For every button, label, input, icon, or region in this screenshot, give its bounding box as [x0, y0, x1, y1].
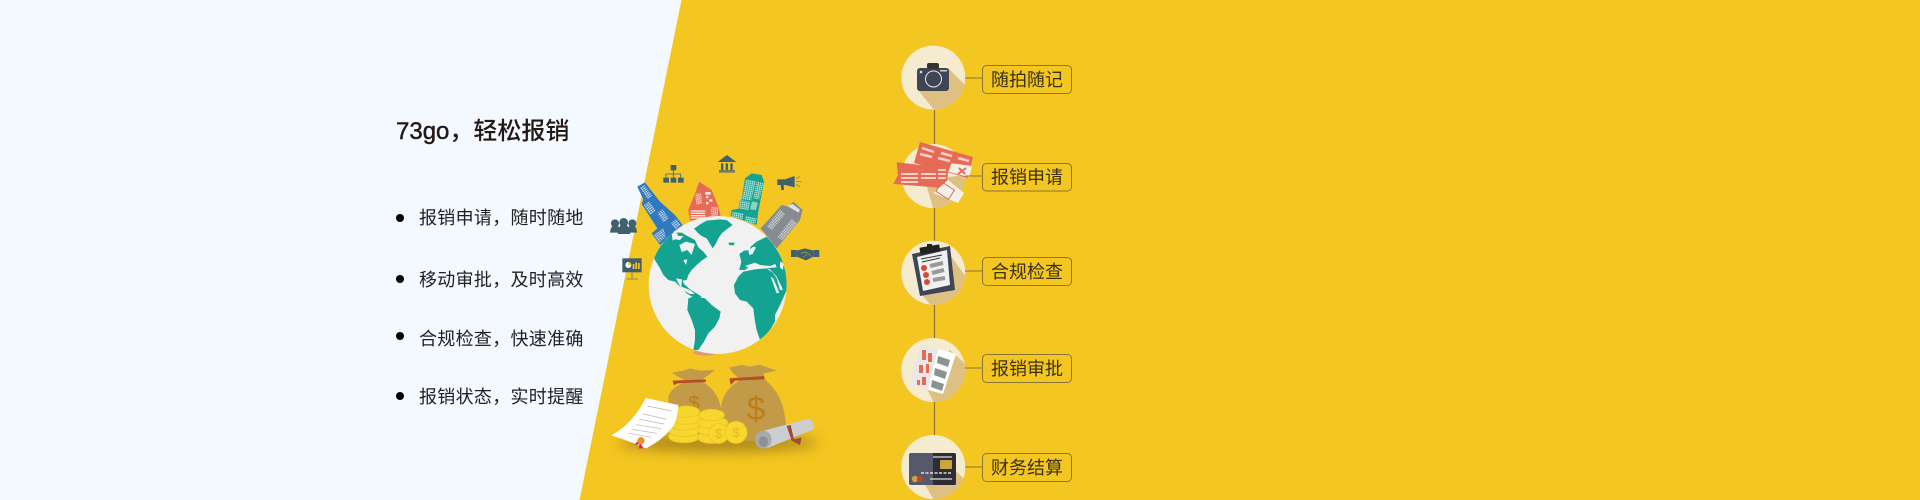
feature list: 移动审批，及时高效 [419, 270, 584, 290]
step 1: camera: 随拍随记 [991, 70, 1063, 90]
feature list: 报销状态，实时提醒 [419, 387, 584, 407]
building: green tower [731, 173, 764, 225]
building: blue tower [637, 182, 683, 245]
money bag right [721, 365, 786, 442]
step 5: bank card: 财务结算 [991, 458, 1063, 478]
money illustration: $ [732, 426, 740, 440]
icon: bank [718, 155, 736, 173]
ground shadow [618, 434, 818, 451]
building: red tower [688, 182, 721, 221]
building: grey tower [761, 202, 803, 248]
timeline vertical connector [934, 110, 936, 435]
money bag left [668, 368, 722, 440]
globe illustration with buildings and icons [610, 155, 819, 356]
icon: megaphone [777, 176, 801, 190]
icon: presentation board [622, 258, 642, 279]
feature list: 合规检查，快速准确 [419, 329, 584, 349]
money bag left: $ [688, 392, 700, 415]
icon: people [610, 218, 637, 234]
step 1: camera [901, 46, 1072, 115]
coins [669, 406, 747, 443]
globe sphere [649, 216, 787, 354]
money illustration: $ [715, 427, 722, 441]
feature list: 报销申请，随时随地 [419, 208, 584, 228]
rolled diploma [755, 419, 814, 449]
continents [654, 219, 788, 350]
icon: handshake [791, 248, 819, 260]
money bag right: $ [747, 391, 765, 428]
pink base [693, 350, 717, 356]
money illustration [611, 365, 818, 451]
step 2: tickets [893, 142, 1072, 215]
step 3: clipboard [901, 241, 1072, 310]
title: 73go，轻松报销 [396, 118, 569, 145]
step 4: report pages: 报销审批 [991, 359, 1063, 379]
feature list [396, 208, 584, 407]
step 4: report pages [901, 338, 1072, 405]
icon: org chart [663, 165, 684, 183]
certificate document [611, 398, 678, 448]
step 3: clipboard: 合规检查 [991, 262, 1063, 282]
step 5: bank card [901, 435, 1072, 500]
step 2: tickets: 报销申请 [991, 168, 1063, 188]
background: yellow diagonal panel [580, 0, 1920, 500]
